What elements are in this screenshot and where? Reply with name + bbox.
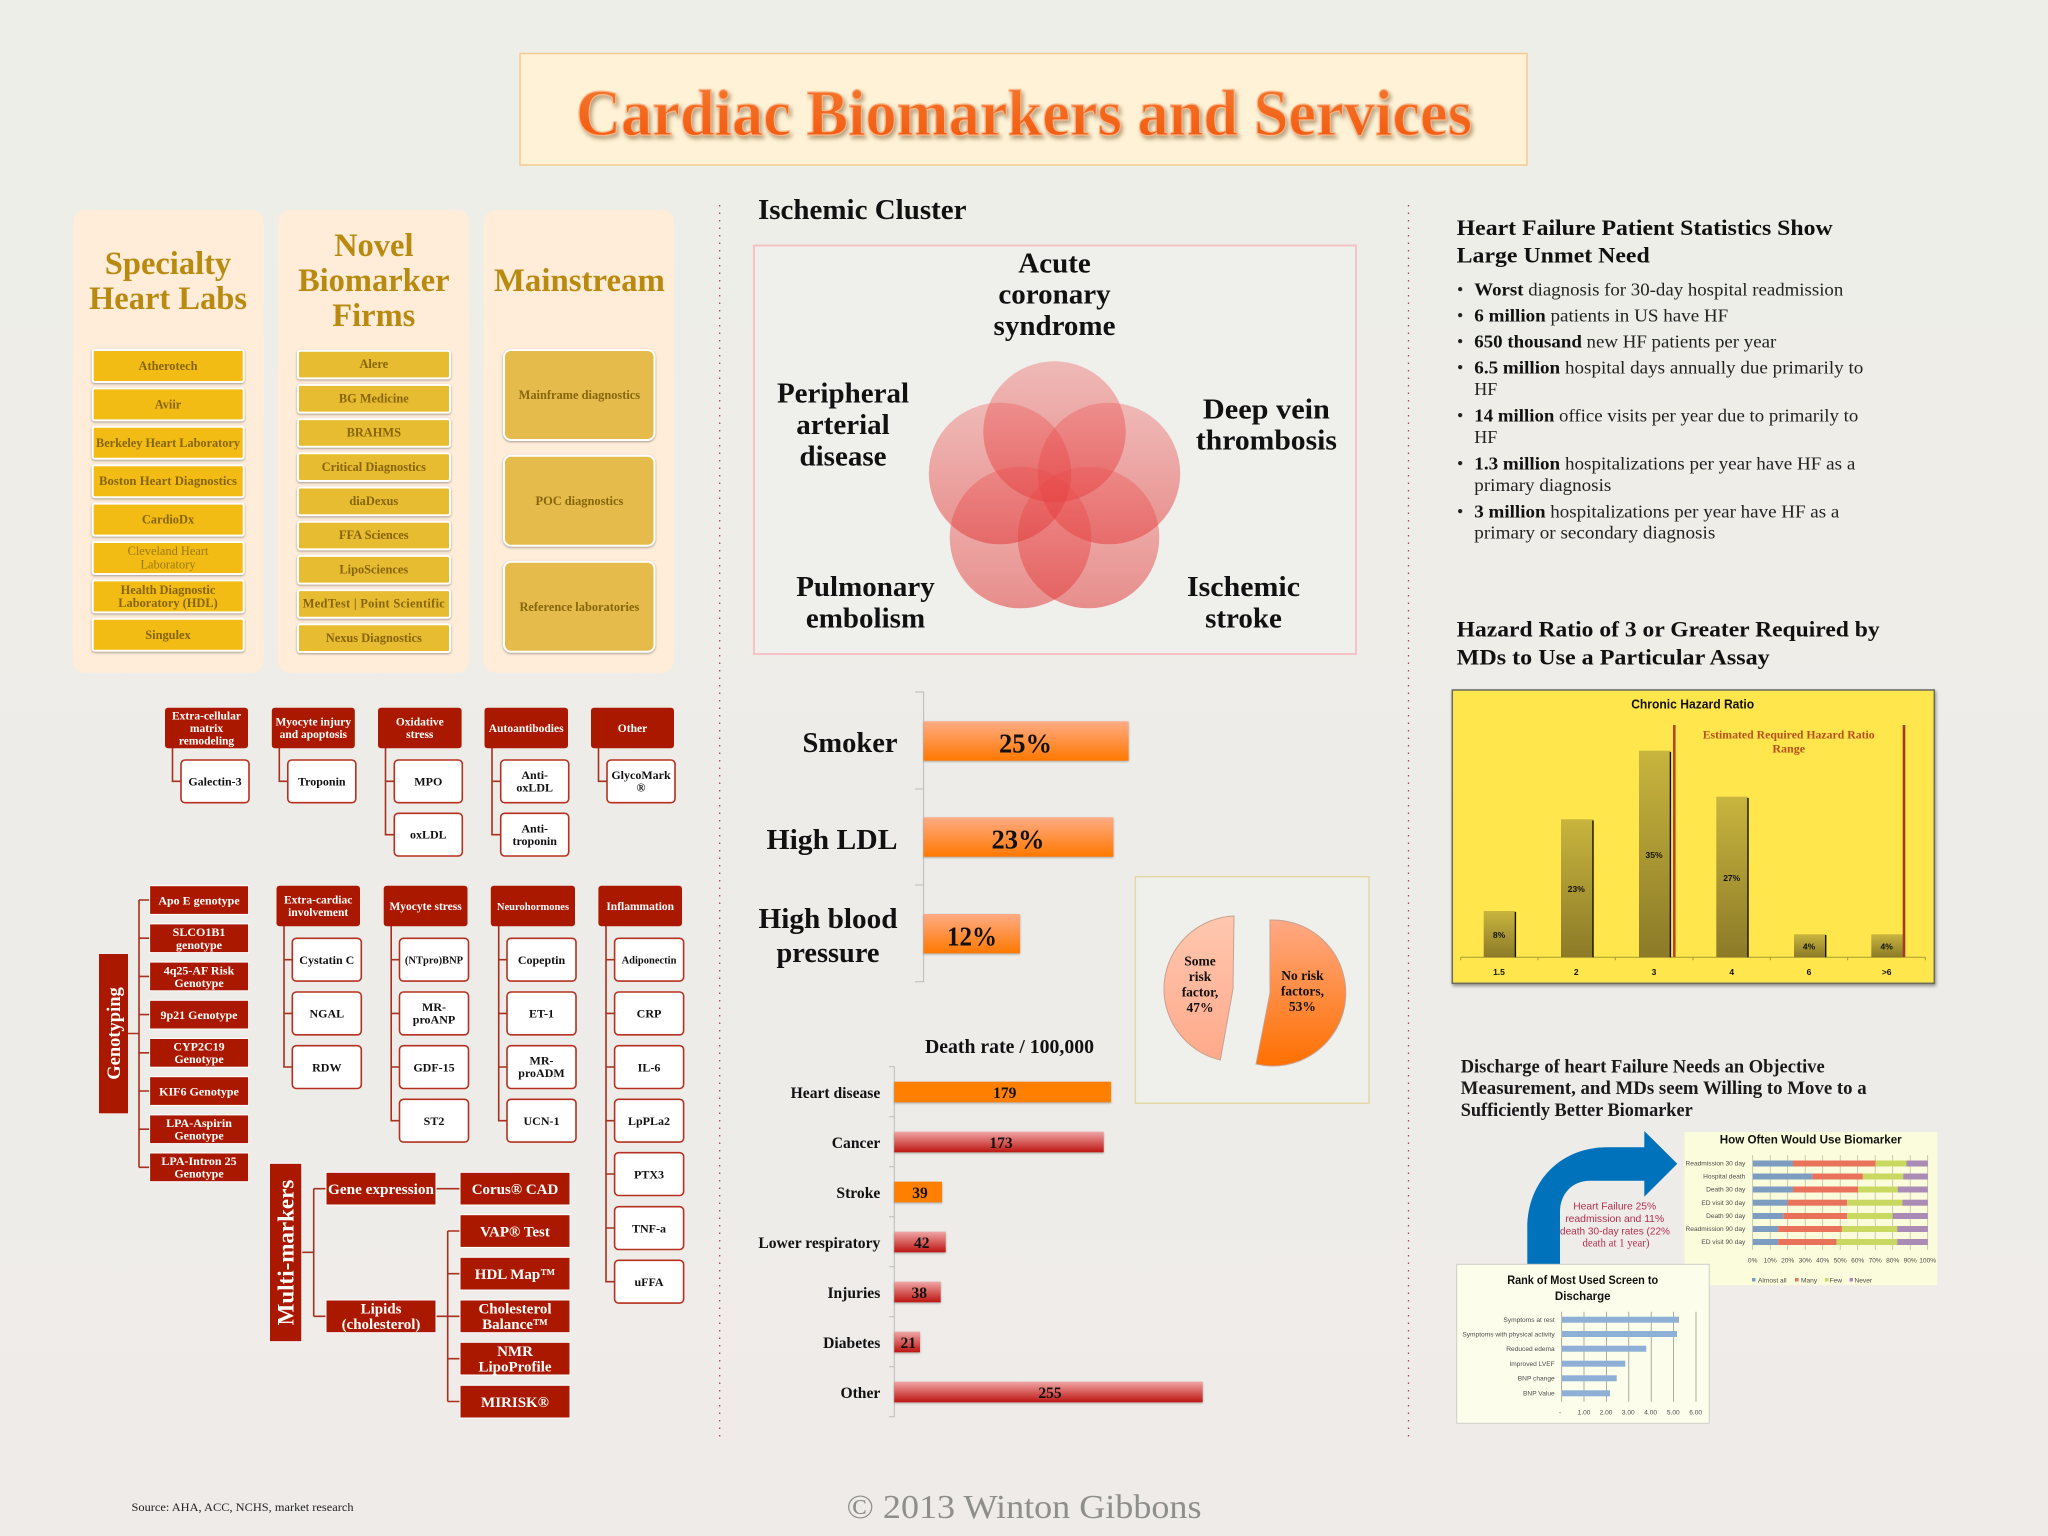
data labels: 35% bbox=[1645, 850, 1663, 860]
tree: extra-cardiac involvement: NGAL bbox=[309, 1007, 344, 1021]
chart: rank of most used screen to discharge bbox=[1457, 1264, 1709, 1423]
row labels: Improved LVEF bbox=[1509, 1361, 1555, 1368]
tree: genotyping: Apo E genotype bbox=[158, 894, 240, 908]
label: deep vein thrombosis: Deep vein bbox=[1203, 394, 1330, 426]
label: ischemic stroke bbox=[1187, 571, 1300, 634]
bar: other bbox=[840, 1382, 1203, 1402]
list: novel firms: Nexus Diagnostics bbox=[326, 631, 422, 645]
bar: high blood pressure bbox=[758, 904, 1020, 969]
tree: myocyte stress: ST2 bbox=[424, 1114, 444, 1128]
bar: heart disease: 179 bbox=[993, 1085, 1017, 1102]
list: heart failure statistics: 6 million patients in US have HF bbox=[1474, 305, 1728, 325]
list: specialty labs: Berkeley Heart Laboratory bbox=[96, 436, 241, 450]
list: mainstream labs: POC diagnostics bbox=[536, 494, 623, 508]
tree: inflammation bbox=[598, 886, 684, 1303]
tree: other bbox=[591, 708, 675, 803]
legend bbox=[1752, 1278, 1873, 1284]
callout: readmission text bbox=[1560, 1201, 1670, 1250]
chart title bbox=[1507, 1275, 1658, 1303]
axis labels: 2 bbox=[1574, 967, 1579, 977]
axis labels: 1.00 bbox=[1578, 1410, 1591, 1416]
axis labels: 50% bbox=[1834, 1258, 1847, 1264]
tree: genotyping: CYP2C19 bbox=[173, 1040, 225, 1054]
list: mainstream labs: Reference laboratories bbox=[519, 600, 639, 614]
bars bbox=[1562, 1317, 1679, 1396]
row labels bbox=[1462, 1317, 1555, 1398]
label: peripheral arterial disease: arterial bbox=[796, 409, 890, 441]
pie slice: some risk factor: Some bbox=[1184, 954, 1216, 968]
bar: high LDL: High LDL bbox=[766, 825, 898, 856]
data labels: 27% bbox=[1723, 873, 1741, 883]
tree: other: ® bbox=[637, 780, 646, 794]
tree: multi-markers: Corus® CAD bbox=[472, 1182, 558, 1198]
list: heart failure statistics: 3 million hospitalizations per year have HF as a bbox=[1474, 501, 1839, 521]
bar: injuries bbox=[827, 1282, 941, 1302]
list: specialty labs: CardioDx bbox=[142, 513, 195, 527]
legend: Never bbox=[1854, 1278, 1873, 1284]
tree: multi-markers: VAP® Test bbox=[480, 1224, 550, 1240]
list: heart failure statistics: • bbox=[1457, 305, 1463, 325]
heading: heart failure statistics bbox=[1457, 215, 1833, 268]
pie slice: some risk factor: 47% bbox=[1186, 1000, 1214, 1015]
heading: hazard ratio bbox=[1457, 617, 1880, 669]
list: heart failure statistics: 1.3 million hospitalizations per year have HF as a bbox=[1474, 453, 1855, 473]
tree: multi-markers: NMR bbox=[497, 1344, 533, 1360]
tree: oxidative stress: stress bbox=[406, 729, 434, 741]
tree: autoantibodies: Anti- bbox=[521, 768, 548, 782]
list: specialty labs: Laboratory bbox=[140, 558, 196, 572]
list: specialty labs: Laboratory (HDL) bbox=[118, 596, 218, 610]
bar: smoker: 25% bbox=[999, 728, 1052, 758]
tree: myocyte stress: GDF-15 bbox=[413, 1060, 455, 1074]
tree: myocyte stress bbox=[384, 886, 468, 1142]
list: novel firms: diaDexus bbox=[349, 494, 398, 508]
bar: smoker: Smoker bbox=[802, 728, 898, 759]
heading: ischemic cluster: Ischemic Cluster bbox=[758, 195, 966, 226]
bar: heart disease bbox=[791, 1082, 1111, 1102]
tree: neurohormones: Copeptin bbox=[518, 953, 565, 967]
list: novel firms: LipoSciences bbox=[339, 562, 408, 576]
bar: high LDL: 23% bbox=[992, 824, 1044, 854]
data labels: 23% bbox=[1568, 884, 1585, 894]
venn diagram circles bbox=[929, 361, 1180, 608]
tree: myocyte injury and apoptosis bbox=[272, 708, 356, 803]
tree: myocyte injury and apoptosis: and apoptosis bbox=[280, 729, 348, 741]
axis labels: 5.00 bbox=[1667, 1410, 1680, 1416]
heading: specialty heart labs bbox=[89, 246, 247, 317]
tree: myocyte stress: MR- bbox=[422, 1000, 446, 1014]
list: heart failure statistics: • bbox=[1457, 358, 1463, 378]
tree: genotyping: Genotype bbox=[174, 1166, 224, 1180]
tree: myocyte stress: proANP bbox=[413, 1012, 455, 1026]
tree: neurohormones: MR- bbox=[530, 1054, 554, 1068]
chart title: How Often Would Use Biomarker bbox=[1720, 1132, 1902, 1146]
tree: genotyping: SLCO1B1 bbox=[173, 925, 225, 939]
list: specialty labs: Health Diagnostic bbox=[121, 583, 216, 597]
tree: multi-markers: (cholesterol) bbox=[342, 1317, 420, 1333]
list: heart failure statistics: HF bbox=[1474, 427, 1497, 447]
list: novel firms: MedTest | Point Scientific bbox=[303, 597, 445, 611]
tree: extra-cardiac involvement: involvement bbox=[288, 907, 348, 919]
list: heart failure statistics: • bbox=[1457, 406, 1463, 426]
data labels: 8% bbox=[1493, 930, 1506, 940]
tree: extra-cardiac involvement: Cystatin C bbox=[299, 953, 354, 967]
list: novel firms: Alere bbox=[359, 357, 389, 371]
tree: autoantibodies: Autoantibodies bbox=[489, 723, 564, 735]
pie slice: some risk factor: factor, bbox=[1182, 984, 1218, 1000]
bar: stroke bbox=[836, 1182, 942, 1202]
bar: injuries: 38 bbox=[912, 1285, 927, 1302]
label: pulmonary embolism: embolism bbox=[806, 602, 925, 634]
axis labels: 70% bbox=[1869, 1258, 1882, 1264]
data labels: 4% bbox=[1803, 942, 1816, 952]
label: pulmonary embolism: Pulmonary bbox=[796, 571, 935, 603]
label: peripheral arterial disease: Peripheral bbox=[777, 378, 909, 410]
tree: multi-markers: HDL Map™ bbox=[475, 1267, 555, 1283]
tree: genotyping bbox=[99, 886, 249, 1182]
callout: readmission text: Heart Failure 25% bbox=[1573, 1201, 1656, 1213]
label: deep vein thrombosis: thrombosis bbox=[1196, 425, 1337, 457]
tree: multi-markers bbox=[269, 1163, 570, 1418]
row labels: Readmission 90 day bbox=[1686, 1226, 1746, 1233]
axis labels: 60% bbox=[1851, 1258, 1864, 1264]
tree: extra-cardiac involvement: Extra-cardiac bbox=[284, 894, 352, 906]
heading: discharge of heart failure bbox=[1461, 1057, 1867, 1121]
title banner: Cardiac Biomarkers and Services bbox=[576, 77, 1472, 150]
heading: heart failure statistics: Heart Failure Patient Statistics Show bbox=[1457, 215, 1833, 240]
bars bbox=[1484, 751, 1903, 957]
tree: inflammation: IL-6 bbox=[638, 1060, 660, 1074]
row labels: ED visit 90 day bbox=[1701, 1239, 1746, 1246]
axis labels: 100% bbox=[1919, 1258, 1936, 1264]
tree: other: Other bbox=[618, 723, 647, 735]
title banner bbox=[520, 54, 1527, 165]
tree: genotyping: genotype bbox=[176, 938, 223, 952]
panel: novel biomarker firms bbox=[278, 210, 469, 673]
range markers: Estimated Required Hazard Ratio bbox=[1703, 728, 1875, 742]
bar: stroke: 39 bbox=[912, 1185, 928, 1202]
label: pulmonary embolism bbox=[796, 571, 935, 634]
tree: oxidative stress: MPO bbox=[414, 774, 442, 788]
tree: extra-cellular matrix remodeling bbox=[165, 708, 249, 803]
tree: neurohormones: proADM bbox=[518, 1066, 565, 1080]
tree: autoantibodies: Anti- bbox=[521, 822, 548, 836]
tree: multi-markers: LipoProfile bbox=[478, 1360, 552, 1376]
label: ischemic stroke: Ischemic bbox=[1187, 571, 1300, 603]
label: acute coronary syndrome: Acute bbox=[1018, 248, 1091, 280]
heading: discharge of heart failure: Sufficiently Better Biomarker bbox=[1461, 1101, 1693, 1121]
tree: genotyping: KIF6 Genotype bbox=[159, 1084, 240, 1098]
tree: oxidative stress: Oxidative bbox=[396, 717, 444, 729]
pie slice: some risk factor bbox=[1164, 916, 1234, 1060]
list: specialty labs bbox=[93, 350, 244, 651]
bar: diabetes bbox=[823, 1332, 920, 1352]
tree: genotyping: Genotype bbox=[174, 976, 224, 990]
bar: high blood pressure: pressure bbox=[776, 938, 880, 969]
list: heart failure statistics: 6.5 million hospital days annually due primarily to bbox=[1474, 358, 1863, 378]
tree: inflammation: CRP bbox=[637, 1007, 661, 1021]
list: heart failure statistics: • bbox=[1457, 453, 1463, 473]
pie slice: no risk factors: No risk bbox=[1281, 968, 1324, 983]
arrow: blue curved arrow bbox=[1527, 1131, 1677, 1265]
bar: other: Other bbox=[840, 1385, 880, 1402]
list: heart failure statistics: primary diagnosis bbox=[1474, 475, 1611, 495]
label: deep vein thrombosis bbox=[1196, 394, 1337, 457]
legend: Many bbox=[1801, 1278, 1818, 1284]
chart title: Chronic Hazard Ratio bbox=[1631, 698, 1755, 712]
label: peripheral arterial disease bbox=[777, 378, 909, 472]
list: novel firms bbox=[298, 351, 450, 652]
tree: genotyping: 4q25-AF Risk bbox=[164, 964, 235, 978]
pie slice: no risk factors: factors, bbox=[1281, 984, 1324, 998]
heading: discharge of heart failure: Discharge of heart Failure Needs an Objective bbox=[1461, 1057, 1825, 1077]
axis labels bbox=[1559, 1410, 1702, 1416]
tree: myocyte stress: Myocyte stress bbox=[389, 901, 462, 913]
heading: novel biomarker firms: Firms bbox=[332, 298, 415, 334]
tree: extra-cellular matrix remodeling: Extra-cellular bbox=[172, 711, 241, 723]
heading: specialty heart labs: Specialty bbox=[105, 246, 231, 282]
row labels: BNP Value bbox=[1523, 1390, 1555, 1398]
list: specialty labs: Aviir bbox=[155, 397, 182, 411]
row labels: Symptoms at rest bbox=[1503, 1317, 1555, 1324]
callout: readmission text: readmission and 11% bbox=[1565, 1213, 1664, 1225]
chart: chronic hazard ratio bbox=[1452, 690, 1934, 983]
bar: high LDL bbox=[766, 817, 1113, 857]
heading: heart failure statistics: Large Unmet Need bbox=[1457, 243, 1650, 268]
heading: hazard ratio: Hazard Ratio of 3 or Greater Required by bbox=[1457, 617, 1880, 642]
heading: novel biomarker firms bbox=[298, 228, 450, 334]
tree: inflammation: Inflammation bbox=[606, 901, 675, 913]
list: novel firms: BRAHMS bbox=[347, 426, 401, 440]
axis labels: 40% bbox=[1816, 1258, 1829, 1264]
bar: diabetes: 21 bbox=[901, 1335, 916, 1352]
list: heart failure statistics: • bbox=[1457, 280, 1463, 300]
tree: neurohormones: ET-1 bbox=[529, 1007, 554, 1021]
list: heart failure statistics: • bbox=[1457, 331, 1463, 351]
heading: specialty heart labs: Heart Labs bbox=[89, 281, 247, 317]
chart: how often would use biomarker bbox=[1684, 1132, 1937, 1285]
data labels bbox=[1493, 850, 1893, 952]
axis labels: - bbox=[1559, 1410, 1561, 1416]
tree: multi-markers: MIRISK® bbox=[481, 1395, 549, 1411]
list: heart failure statistics bbox=[1457, 280, 1863, 542]
axis labels: 1.5 bbox=[1493, 967, 1505, 977]
axis labels: 4.00 bbox=[1644, 1410, 1657, 1416]
tree: inflammation: uFFA bbox=[634, 1275, 664, 1289]
chart title: Death rate / 100,000 bbox=[925, 1037, 1094, 1058]
tree: myocyte injury and apoptosis: Troponin bbox=[298, 774, 346, 788]
axis labels: 90% bbox=[1904, 1258, 1917, 1264]
tree: extra-cellular matrix remodeling: remodeling bbox=[179, 736, 234, 748]
tree: inflammation: PTX3 bbox=[634, 1167, 664, 1181]
list: specialty labs: Boston Heart Diagnostics bbox=[99, 474, 237, 488]
tree: multi-markers: Balance™ bbox=[482, 1317, 548, 1333]
tree: neurohormones bbox=[491, 886, 576, 1142]
list: heart failure statistics: • bbox=[1457, 501, 1463, 521]
heading: novel biomarker firms: Novel bbox=[334, 228, 414, 264]
callout: readmission text: death at 1 year) bbox=[1582, 1238, 1650, 1250]
panel: specialty heart labs bbox=[73, 210, 264, 673]
tree: neurohormones: Neurohormones bbox=[497, 902, 569, 913]
tree: other: GlycoMark bbox=[611, 768, 671, 782]
panel: mainstream bbox=[484, 210, 674, 673]
bar: heart disease: Heart disease bbox=[791, 1085, 880, 1102]
bar: smoker bbox=[802, 721, 1129, 761]
axis labels: 10% bbox=[1764, 1258, 1777, 1264]
axis labels: 4 bbox=[1729, 967, 1734, 977]
heading: hazard ratio: MDs to Use a Particular Assay bbox=[1457, 644, 1770, 669]
list: specialty labs: Atherotech bbox=[139, 359, 198, 373]
pie slice: no risk factors bbox=[1256, 920, 1346, 1066]
row labels: Readmission 30 day bbox=[1686, 1160, 1746, 1168]
tree: multi-markers: Lipids bbox=[361, 1302, 402, 1318]
tree: genotyping: Genotype bbox=[174, 1052, 224, 1066]
list: heart failure statistics: Worst diagnosis for 30-day hospital readmission bbox=[1474, 280, 1843, 300]
row labels: ED visit 30 day bbox=[1701, 1200, 1746, 1207]
bar: lower respiratory: Lower respiratory bbox=[758, 1235, 880, 1252]
row labels: Death 30 day bbox=[1706, 1186, 1746, 1194]
label: acute coronary syndrome: syndrome bbox=[994, 310, 1116, 342]
list: heart failure statistics: primary or secondary diagnosis bbox=[1474, 522, 1715, 542]
tree: multi-markers: Multi-markers bbox=[274, 1180, 298, 1325]
bar: cancer: Cancer bbox=[832, 1135, 880, 1152]
tree: autoantibodies bbox=[484, 708, 569, 856]
heading: discharge of heart failure: Measurement, and MDs seem Willing to Move to a bbox=[1461, 1079, 1867, 1099]
axis labels: 3 bbox=[1652, 967, 1657, 977]
row labels: BNP change bbox=[1518, 1376, 1555, 1382]
bar: high blood pressure: 12% bbox=[947, 920, 997, 952]
row labels: Death 90 day bbox=[1706, 1213, 1746, 1220]
bar: cancer bbox=[832, 1132, 1104, 1152]
axis labels: 3.00 bbox=[1622, 1410, 1635, 1416]
source note: Source: AHA, ACC, NCHS, market research bbox=[132, 1500, 354, 1514]
label: acute coronary syndrome bbox=[994, 248, 1116, 342]
pie slice: some risk factor: risk bbox=[1189, 969, 1212, 984]
row labels: Symptoms with physical activity bbox=[1462, 1332, 1555, 1338]
tree: extra-cellular matrix remodeling: matrix bbox=[190, 723, 223, 735]
tree: myocyte stress: (NTpro)BNP bbox=[405, 956, 464, 966]
list: novel firms: FFA Sciences bbox=[339, 528, 409, 542]
tree: genotyping: 9p21 Genotype bbox=[160, 1008, 238, 1022]
legend: Few bbox=[1830, 1278, 1842, 1284]
chart: death rate per 100,000 bbox=[758, 1037, 1203, 1417]
tree: myocyte injury and apoptosis: Myocyte injury bbox=[275, 717, 351, 729]
chart: risk factor bars bbox=[758, 692, 1129, 982]
bar: cancer: 173 bbox=[989, 1135, 1013, 1152]
tree: inflammation: Adiponectin bbox=[622, 956, 677, 966]
tree: inflammation: LpPLa2 bbox=[628, 1114, 670, 1128]
axis labels: 30% bbox=[1799, 1258, 1812, 1264]
chart title: Rank of Most Used Screen to bbox=[1507, 1275, 1658, 1287]
tree: oxidative stress bbox=[378, 708, 462, 856]
axis labels bbox=[1493, 967, 1892, 977]
list: specialty labs: Cleveland Heart bbox=[128, 544, 209, 558]
row labels bbox=[1686, 1160, 1746, 1246]
bar: high blood pressure: High blood bbox=[758, 904, 898, 935]
bar: lower respiratory bbox=[758, 1232, 946, 1252]
heading: novel biomarker firms: Biomarker bbox=[298, 263, 450, 299]
list: novel firms: BG Medicine bbox=[339, 391, 409, 405]
bar: injuries: Injuries bbox=[827, 1285, 880, 1302]
tree: extra-cardiac involvement bbox=[276, 886, 361, 1088]
chart title: Discharge bbox=[1555, 1291, 1611, 1303]
bar: stroke: Stroke bbox=[836, 1185, 880, 1202]
axis labels: 6.00 bbox=[1689, 1410, 1702, 1416]
row labels: Reduced edema bbox=[1506, 1346, 1555, 1353]
bar: lower respiratory: 42 bbox=[914, 1235, 930, 1252]
tree: extra-cellular matrix remodeling: Galectin-3 bbox=[188, 774, 242, 788]
tree: genotyping: Genotype bbox=[174, 1128, 224, 1142]
tree: genotyping: LPA-Intron 25 bbox=[161, 1154, 237, 1168]
axis labels: 6 bbox=[1807, 967, 1812, 977]
axis labels: 80% bbox=[1886, 1258, 1899, 1264]
callout: readmission text: death 30-day rates (22% bbox=[1560, 1225, 1670, 1237]
axis labels: 20% bbox=[1781, 1258, 1794, 1264]
tree: genotyping: Genotyping bbox=[105, 986, 125, 1080]
list: novel firms: Critical Diagnostics bbox=[322, 460, 426, 474]
tree: genotyping: LPA-Aspirin bbox=[166, 1116, 232, 1130]
list: mainstream labs bbox=[504, 350, 654, 652]
axis labels: 0% bbox=[1748, 1258, 1758, 1264]
bar: other: 255 bbox=[1038, 1385, 1062, 1402]
label: acute coronary syndrome: coronary bbox=[998, 278, 1111, 310]
panel: ischemic cluster venn bbox=[754, 246, 1356, 654]
tree: multi-markers: Cholesterol bbox=[478, 1302, 552, 1318]
row labels: Hospital death bbox=[1703, 1174, 1746, 1180]
bar: diabetes: Diabetes bbox=[823, 1335, 880, 1352]
tree: oxidative stress: oxLDL bbox=[410, 828, 447, 842]
data labels: 4% bbox=[1881, 942, 1893, 952]
tree: autoantibodies: oxLDL bbox=[516, 780, 553, 794]
panel: risk factor pie bbox=[1135, 877, 1369, 1103]
axis labels bbox=[1748, 1258, 1936, 1264]
range markers: Range bbox=[1772, 742, 1806, 756]
label: peripheral arterial disease: disease bbox=[800, 440, 887, 472]
list: specialty labs: Singulex bbox=[145, 628, 192, 642]
range markers bbox=[1673, 725, 1905, 957]
tree: autoantibodies: troponin bbox=[512, 834, 557, 848]
list: heart failure statistics: HF bbox=[1474, 379, 1497, 399]
tree: multi-markers: Gene expression bbox=[328, 1182, 435, 1198]
tree: neurohormones: UCN-1 bbox=[524, 1114, 560, 1128]
list: heart failure statistics: 14 million office visits per year due to primarily to bbox=[1474, 406, 1858, 426]
pie slice: no risk factors: 53% bbox=[1289, 999, 1316, 1014]
tree: extra-cardiac involvement: RDW bbox=[312, 1060, 341, 1074]
axis labels: >6 bbox=[1882, 967, 1892, 977]
label: ischemic stroke: stroke bbox=[1205, 602, 1282, 634]
list: mainstream labs: Mainframe diagnostics bbox=[519, 388, 640, 402]
list: heart failure statistics: 650 thousand new HF patients per year bbox=[1474, 331, 1776, 351]
heading: mainstream: Mainstream bbox=[494, 263, 665, 299]
copyright: © 2013 Winton Gibbons bbox=[846, 1489, 1202, 1526]
legend: Almost all bbox=[1758, 1278, 1787, 1284]
axis labels: 2.00 bbox=[1600, 1410, 1613, 1416]
tree: inflammation: TNF-a bbox=[632, 1221, 666, 1235]
stacked bars bbox=[1753, 1160, 1928, 1245]
